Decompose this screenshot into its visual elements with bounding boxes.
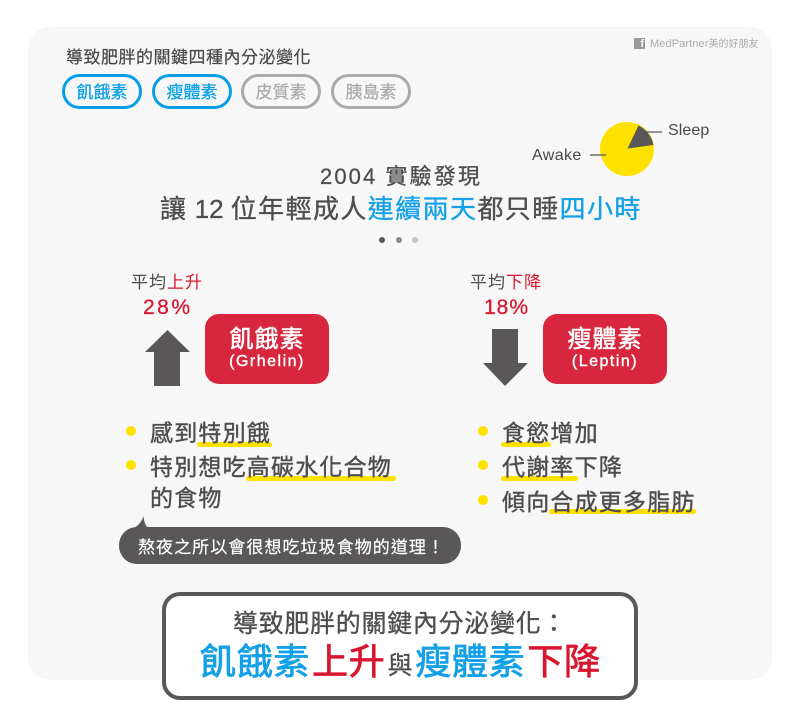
label: leptin box xyxy=(543,314,667,384)
label: ghrelin box: 飢餓素 xyxy=(230,319,304,354)
icon: up arrow xyxy=(145,330,190,386)
callout: late night junk food: 熬夜之所以會很想吃垃圾食物的道理！ xyxy=(138,533,445,558)
label: leptin box: (Leptin) xyxy=(572,353,638,370)
list: leptin effects: 代謝率下降 xyxy=(502,448,623,482)
stat: ghrelin rises 28% xyxy=(131,268,203,319)
credit: MedPartner facebook: MedPartner美的好朋友 xyxy=(650,38,758,50)
stat: leptin falls 18% xyxy=(470,268,542,319)
list: leptin effects: 食慾增加 xyxy=(502,414,599,448)
icon: down arrow xyxy=(483,329,528,386)
list: ghrelin effects xyxy=(126,414,396,513)
tab: insulin inactive xyxy=(331,74,411,109)
label: ghrelin box: (Grhelin) xyxy=(229,353,305,370)
stat: leptin falls 18%: 18% xyxy=(484,296,529,319)
heading: 2004 experiment: 2004 實驗發現 xyxy=(320,164,482,189)
chart: sleep pie: Awake xyxy=(532,147,582,164)
chart: sleep pie: Sleep xyxy=(668,122,709,139)
conclusion heading: 導致肥胖的關鍵內分泌變化： xyxy=(233,604,567,640)
list: ghrelin effects: 特別想吃高碳水化合物 xyxy=(150,448,392,482)
tab: leptin active: 瘦體素 xyxy=(166,78,218,103)
stat: ghrelin rises 28%: 28% xyxy=(143,296,193,319)
tab: cortisol inactive xyxy=(241,74,321,109)
pagination dots xyxy=(379,237,418,243)
conclusion statement: 飢餓素上升與瘦體素下降 xyxy=(200,633,601,685)
tab: ghrelin active xyxy=(62,74,142,109)
label: ghrelin box xyxy=(205,314,329,384)
stat: ghrelin rises 28%: 平均上升 xyxy=(131,268,203,293)
panel: conclusion box xyxy=(162,592,638,700)
tab: leptin active xyxy=(152,74,232,109)
list: leptin effects: 傾向合成更多脂肪 xyxy=(502,483,696,517)
tab: ghrelin active: 飢餓素 xyxy=(76,78,128,103)
tab: insulin inactive: 胰島素 xyxy=(346,78,396,103)
chart: sleep pie xyxy=(532,122,709,176)
heading: experiment description: 讓 12 位年輕成人連續兩天都只睡四小時 xyxy=(160,194,642,224)
list: leptin effects xyxy=(478,414,696,517)
stat: leptin falls 18%: 平均下降 xyxy=(470,268,542,293)
heading: four hormones title: 導致肥胖的關鍵四種內分泌變化 xyxy=(66,43,311,68)
list: ghrelin effects: 感到特別餓 xyxy=(150,414,271,448)
tab: cortisol inactive: 皮質素 xyxy=(256,78,306,103)
list: ghrelin effects: 的食物 xyxy=(150,479,223,513)
label: leptin box: 瘦體素 xyxy=(568,319,642,354)
callout: late night junk food xyxy=(119,516,461,564)
